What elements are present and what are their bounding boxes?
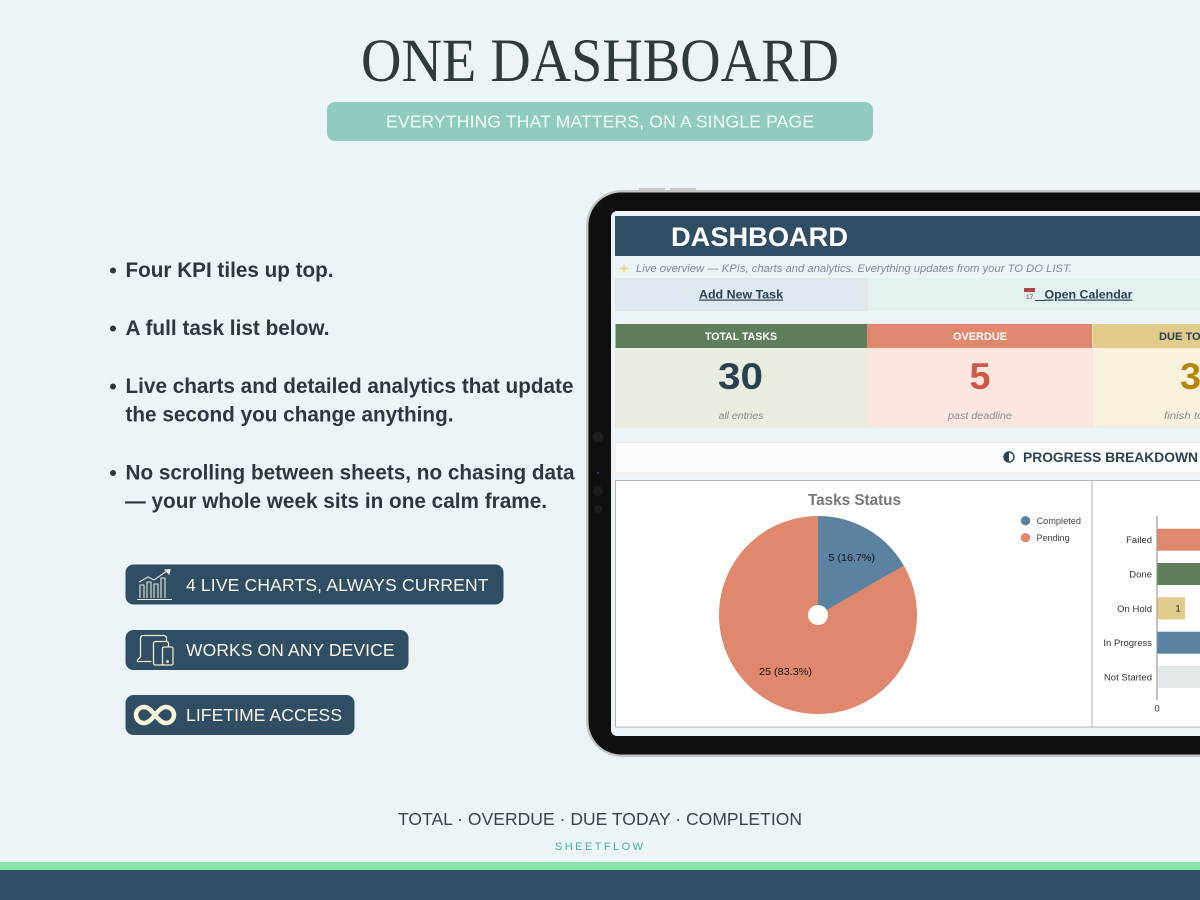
icon: calendar: 17	[1026, 294, 1034, 301]
bullet: no scrolling: — your whole week sits in one calm frame.	[125, 489, 547, 513]
KPI tile: total tasks: 30	[718, 356, 763, 397]
KPI tile: due today: 3	[1180, 356, 1200, 397]
panel: status bar chart	[1092, 480, 1200, 727]
bar labels: Not Started	[1104, 672, 1152, 684]
KPI tile: due today	[1092, 324, 1200, 427]
panel: pie chart	[616, 480, 1092, 727]
icon: rising bar chart	[137, 570, 172, 600]
KPI tile: total tasks: all entries	[718, 411, 764, 422]
bar labels: On Hold	[1117, 604, 1152, 615]
axis zero label: 0	[1154, 704, 1160, 714]
bullet: no scrolling: No scrolling between sheets, no chasing data	[126, 460, 576, 484]
bullet: live charts: the second you change anything.	[126, 402, 454, 426]
brand name: SHEETFLOW	[555, 841, 644, 853]
subtitle pill: EVERYTHING THAT MATTERS, ON A SINGLE PAGE	[386, 112, 814, 132]
bullet: task list: A full task list below.	[126, 316, 330, 340]
bar: failed	[1158, 529, 1200, 551]
tablet bezel	[588, 192, 1200, 754]
pie chart: 25 (83.3%)	[759, 666, 812, 678]
bullet: live charts	[110, 374, 574, 426]
bar: on hold	[1158, 597, 1185, 620]
tablet top buttons	[639, 188, 696, 190]
button: open calendar: Open Calendar	[1044, 288, 1133, 302]
badge: live charts	[126, 564, 504, 604]
section heading: progress breakdown	[615, 442, 1200, 473]
badge: lifetime access	[126, 695, 354, 735]
pie chart: 5 (16.7%)	[828, 552, 875, 564]
pie legend	[1021, 516, 1081, 544]
KPI tile: total tasks: TOTAL TASKS	[705, 331, 777, 343]
badge: live charts: 4 LIVE CHARTS, ALWAYS CURRENT	[186, 575, 489, 595]
section heading: progress breakdown: PROGRESS BREAKDOWN	[1023, 450, 1198, 465]
bullet list	[110, 258, 576, 513]
footer band	[0, 870, 1200, 900]
bar: on hold: 1	[1175, 604, 1181, 614]
footer tagline: TOTAL · OVERDUE · DUE TODAY · COMPLETION	[398, 809, 802, 829]
bar: done	[1158, 563, 1200, 585]
dashboard header: DASHBOARD	[671, 222, 848, 252]
bullet: KPI tiles: Four KPI tiles up top.	[126, 258, 334, 282]
icon: infinity	[136, 707, 174, 723]
tablet cameras	[592, 432, 604, 513]
icon: calendar	[1024, 288, 1035, 301]
dashboard header	[615, 216, 1200, 256]
pie legend: Pending	[1036, 533, 1070, 544]
icon: laptop, tablet and phone	[138, 636, 173, 665]
title: ONE DASHBOARD	[361, 28, 839, 95]
bar: in progress	[1158, 632, 1200, 654]
KPI tile: overdue: OVERDUE	[953, 331, 1007, 343]
subtitle pill	[327, 102, 873, 141]
KPI tile: total tasks	[615, 324, 867, 427]
button: add new task: Add New Task	[699, 288, 783, 302]
icon: half circle	[1004, 452, 1014, 462]
bar labels: Failed	[1126, 535, 1152, 546]
badge: any device	[126, 630, 408, 670]
bullet: no scrolling	[110, 460, 576, 513]
footer accent stripe	[0, 862, 1200, 870]
bar labels	[1103, 535, 1152, 684]
overview line: Live overview — KPIs, charts and analytics. Everything updates from your TO DO LIST.	[636, 263, 1072, 275]
button: add new task	[615, 278, 868, 310]
KPI tile: overdue: past deadline	[947, 411, 1012, 422]
tablet mockup	[586, 188, 1200, 757]
bar labels: Done	[1129, 570, 1152, 580]
pie legend: Completed	[1036, 516, 1081, 527]
icon: sparkle	[619, 263, 629, 274]
tablet screen	[611, 211, 1200, 736]
button: open calendar	[868, 278, 1200, 311]
chart axis	[1156, 516, 1158, 700]
badge: lifetime access: LIFETIME ACCESS	[186, 705, 342, 725]
pie chart	[719, 516, 917, 714]
bar: not started	[1158, 666, 1200, 688]
badge: any device: WORKS ON ANY DEVICE	[186, 640, 394, 660]
tablet frame	[586, 190, 1200, 757]
bullet: live charts: Live charts and detailed analytics that update	[126, 374, 574, 398]
KPI tile: overdue	[867, 324, 1092, 427]
KPI tile: overdue: 5	[970, 356, 990, 397]
chart title: Tasks Status	[808, 492, 901, 509]
bar labels: In Progress	[1103, 638, 1152, 649]
